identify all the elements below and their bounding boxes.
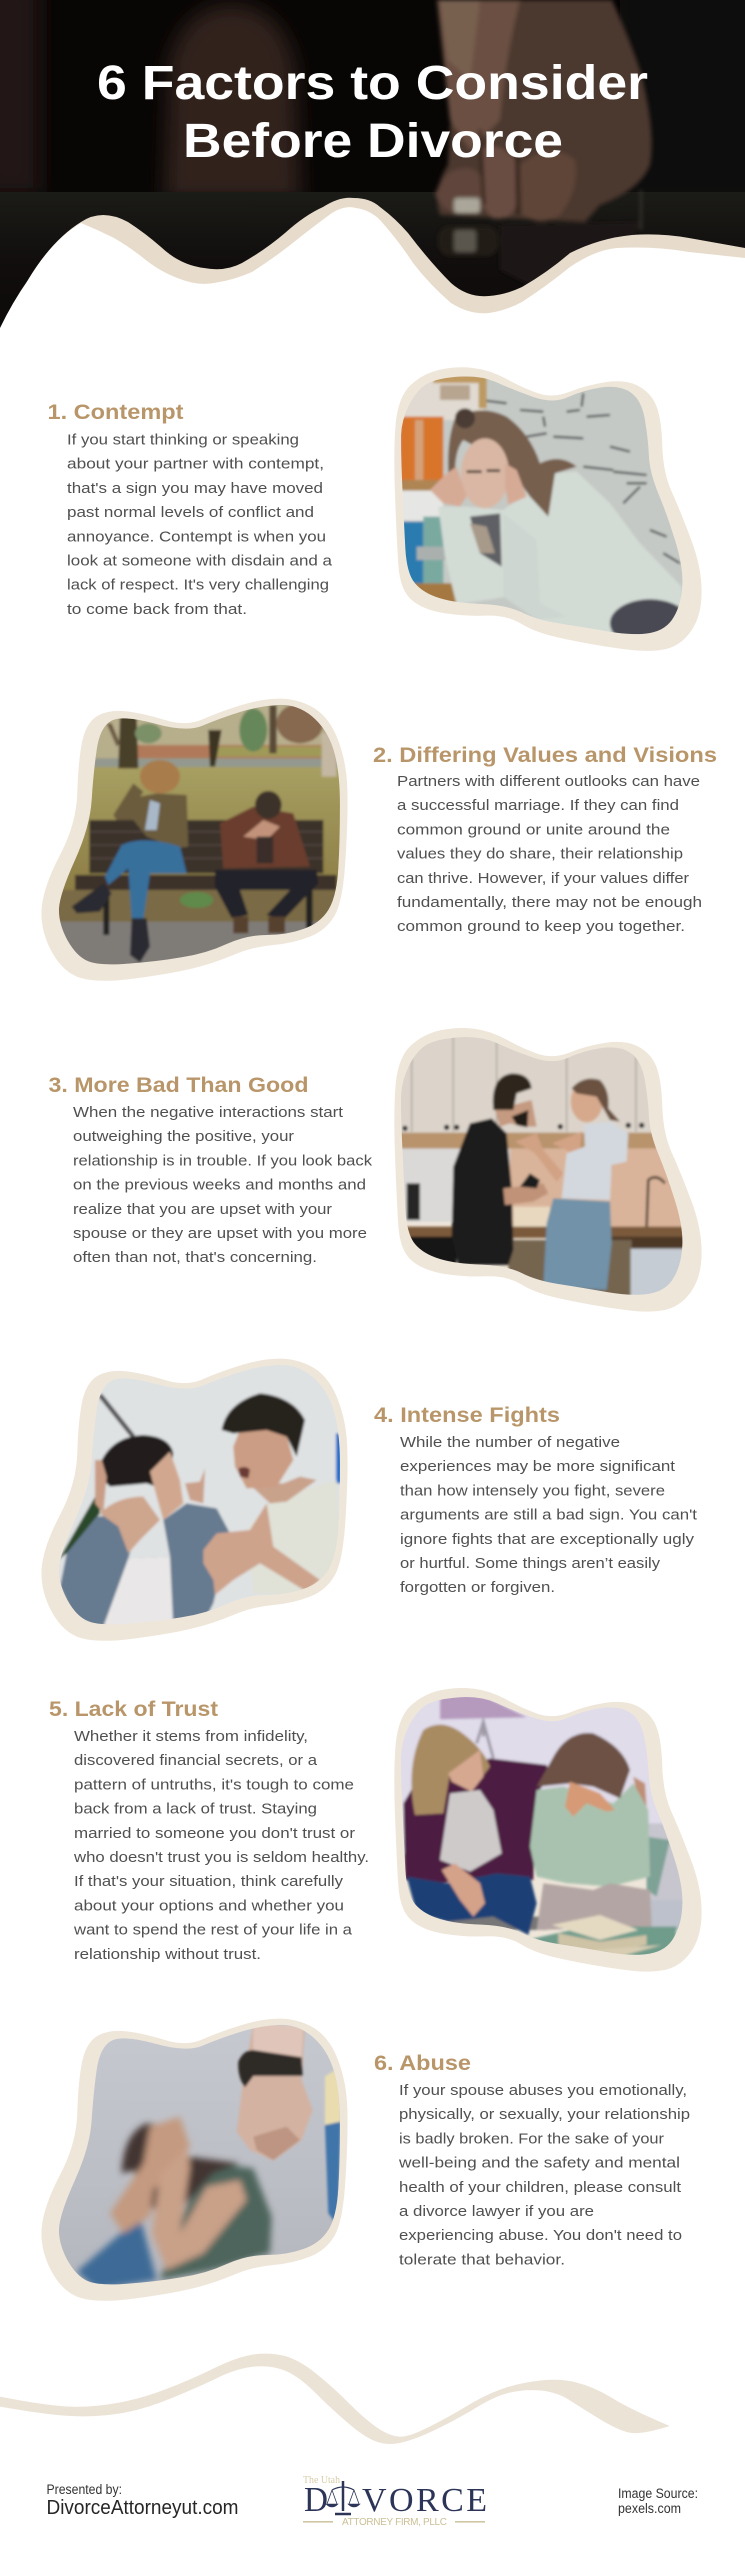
header photo: hand removing wedding ring: [0, 0, 745, 345]
header wave: beige band: [0, 198, 745, 345]
footer: image source: Image Source:: [618, 2486, 698, 2501]
body text: More Bad Than Good: often than not, that's concerning.: [73, 1249, 317, 1266]
panel: 5. Lack of Trust text: [49, 1697, 369, 1963]
footer: presented by: Presented by:: [46, 2482, 122, 2497]
photo: fist raised over cowering woman in blob frame: [33, 2019, 350, 2301]
body text: More Bad Than Good: spouse or they are upset with you more: [73, 1225, 367, 1242]
body text: Differing Values: can thrive. However, if your values differ: [397, 870, 689, 887]
title: 6 Factors to Consider: [97, 57, 648, 110]
body text: Intense Fights: experiences may be more significant: [400, 1458, 676, 1475]
body text: Abuse: If your spouse abuses you emotionally,: [399, 2082, 687, 2099]
logo: The Utah Divorce Attorney Firm: [303, 2474, 487, 2528]
body text: Lack of Trust: about your options and whether you: [74, 1897, 344, 1914]
footer: image source: pexels.com: [618, 2501, 681, 2516]
photo: man comforting crying woman in blob frame: [393, 1687, 702, 1972]
body text: More Bad Than Good: outweighing the positive, your: [73, 1128, 294, 1145]
body text: Contempt: lack of respect. It's very challenging: [67, 577, 329, 594]
body text: Lack of Trust: want to spend the rest of your life in a: [73, 1922, 353, 1939]
body text: Differing Values: values they do share, their relationship: [397, 846, 683, 863]
body text: Contempt: that's a sign you may have moved: [67, 480, 323, 497]
body text: Intense Fights: While the number of negative: [400, 1434, 620, 1451]
body text: More Bad Than Good: relationship is in trouble. If you look back: [73, 1152, 372, 1169]
panel: 3. More Bad Than Good text: [48, 1073, 372, 1266]
header wave: white page edge: [0, 207, 745, 345]
body text: Intense Fights: [400, 1434, 698, 1596]
logo: The Utah Divorce Attorney Firm: VORCE: [362, 2482, 487, 2519]
body text: Intense Fights: than how intensely you fight, severe: [400, 1482, 665, 1499]
body text: Intense Fights: arguments are still a bad sign. You can't: [400, 1507, 698, 1524]
heading: 3. More Bad Than Good: 3. More Bad Than Good: [48, 1073, 308, 1097]
logo: The Utah Divorce Attorney Firm: The Utah: [303, 2474, 340, 2486]
body text: Contempt: If you start thinking or speaking: [67, 432, 299, 448]
body text: Differing Values: common ground to keep you together.: [397, 918, 685, 935]
panel: 6. Abuse text: [374, 2051, 690, 2268]
body text: Intense Fights: ignore fights that are exceptionally ugly: [400, 1531, 694, 1548]
body text: Differing Values: a successful marriage. If they can find: [397, 797, 679, 814]
body text: Differing Values: common ground or unite around the: [397, 821, 670, 838]
footer: presented by: [46, 2482, 238, 2519]
body text: Lack of Trust: discovered financial secrets, or a: [74, 1752, 318, 1769]
logo: The Utah Divorce Attorney Firm: ATTORNEY FIRM, PLLC: [342, 2517, 447, 2528]
body text: Abuse: health of your children, please consult: [399, 2179, 682, 2196]
heading: 1. Contempt: 1. Contempt: [48, 400, 184, 424]
body text: Lack of Trust: Whether it stems from infidelity,: [74, 1728, 308, 1745]
title: Before Divorce: [183, 115, 563, 168]
logo: The Utah Divorce Attorney Firm: D: [304, 2480, 328, 2519]
body text: More Bad Than Good: on the previous weeks and months and: [73, 1177, 366, 1194]
body text: More Bad Than Good: realize that you are upset with your: [73, 1201, 332, 1218]
title: [97, 57, 648, 168]
heading: 6. Abuse: 6. Abuse: [374, 2051, 471, 2075]
photo: couple on park bench in blob frame: [33, 699, 350, 981]
body text: Contempt: annoyance. Contempt is when you: [67, 528, 326, 545]
panel: 4. Intense Fights text: [374, 1403, 698, 1596]
photo: woman with hands on temples in blob frame: [394, 367, 702, 651]
body text: Lack of Trust: If that's your situation, think carefully: [74, 1873, 343, 1890]
footer: image source: [618, 2486, 698, 2516]
body text: Abuse: tolerate that behavior.: [399, 2251, 565, 2268]
footer wave ribbon: [0, 2354, 670, 2444]
body text: Lack of Trust: [73, 1728, 369, 1963]
photo: man shouting at woman covering ears in blob frame: [33, 1359, 350, 1641]
body text: Contempt: [67, 432, 333, 618]
body text: Lack of Trust: married to someone you don't trust or: [74, 1825, 355, 1842]
panel: 1. Contempt text: [48, 400, 333, 618]
photo: couple arguing in kitchen in blob frame: [393, 1027, 702, 1312]
body text: Abuse: well-being and the safety and mental: [398, 2155, 680, 2172]
body text: Differing Values: Partners with different outlooks can have: [397, 773, 700, 790]
body text: More Bad Than Good: [73, 1104, 372, 1266]
body text: Contempt: to come back from that.: [67, 601, 247, 618]
heading: 5. Lack of Trust: 5. Lack of Trust: [49, 1697, 218, 1721]
body text: Abuse: is badly broken. For the sake of your: [399, 2130, 664, 2147]
body text: Contempt: past normal levels of conflict and: [67, 504, 314, 521]
body text: Intense Fights: forgotten or forgiven.: [400, 1579, 555, 1596]
body text: Lack of Trust: pattern of untruths, it's tough to come: [74, 1776, 354, 1793]
body text: Abuse: experiencing abuse. You don't need to: [399, 2227, 682, 2244]
body text: Differing Values: fundamentally, there may not be enough: [397, 894, 702, 911]
heading: 4. Intense Fights: 4. Intense Fights: [374, 1403, 560, 1427]
panel: 2. Differing Values and Visions text: [373, 743, 717, 935]
footer: presented by: DivorceAttorneyut.com: [46, 2497, 238, 2519]
body text: Lack of Trust: who doesn't trust you is seldom healthy.: [73, 1849, 369, 1866]
body text: More Bad Than Good: When the negative interactions start: [73, 1104, 344, 1121]
icon: scales of justice: [326, 2481, 360, 2514]
body text: Lack of Trust: relationship without trust.: [74, 1946, 261, 1963]
body text: Contempt: look at someone with disdain and a: [67, 552, 333, 570]
body text: Intense Fights: or hurtful. Some things aren’t easily: [400, 1555, 660, 1572]
heading: 2. Differing Values and Visions: 2. Differing Values and Visions: [373, 743, 717, 767]
body text: Abuse: a divorce lawyer if you are: [399, 2203, 594, 2220]
body text: Contempt: about your partner with contempt,: [67, 456, 324, 473]
body text: Lack of Trust: back from a lack of trust. Staying: [74, 1801, 317, 1818]
body text: Abuse: [398, 2082, 690, 2268]
body text: Abuse: physically, or sexually, your relationship: [399, 2106, 690, 2123]
body text: Differing Values: [397, 773, 702, 935]
